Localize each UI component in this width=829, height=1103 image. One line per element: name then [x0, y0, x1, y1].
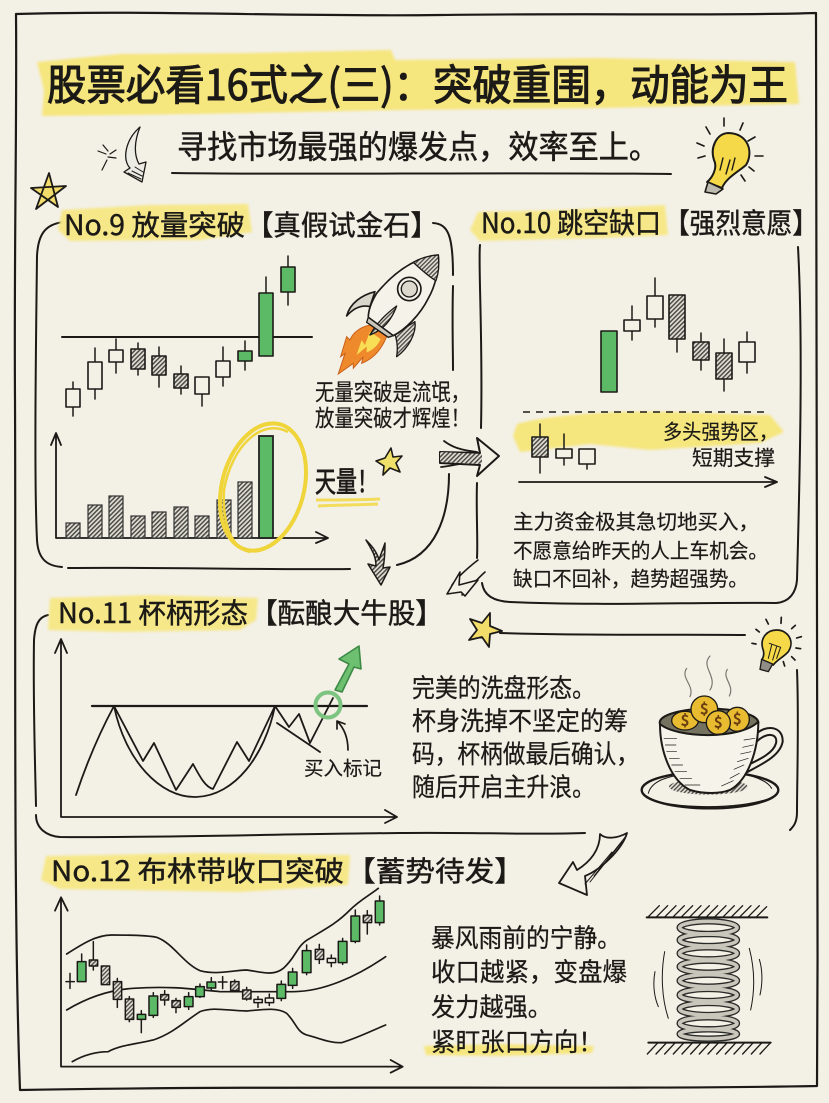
icon: star small — [376, 448, 402, 475]
heading: No.10 跳空缺口 — [481, 202, 661, 242]
explanation text: 主力资金极其急切地买入， — [513, 505, 759, 535]
cup rim — [660, 709, 758, 737]
yellow circle highlight — [207, 414, 319, 560]
heading: No.9 放量突破 — [64, 204, 245, 244]
explanation text: 缺口不回补，趋势超强势。 — [513, 562, 748, 592]
panel: No.10 gap — [470, 202, 818, 604]
rocket caption: 无量突破是流氓， — [315, 373, 470, 407]
icon: star top left — [31, 173, 66, 209]
rocket caption: 放量突破才辉煌！ — [315, 399, 470, 433]
icon: rocket — [338, 255, 439, 374]
subtitle: 寻找市场最强的爆发点，效率至上。 — [177, 122, 659, 168]
support zone label — [663, 415, 778, 471]
icon: light bulb — [697, 118, 763, 194]
Bollinger chart — [55, 888, 403, 1073]
explanation text: 完美的洗盘形态。 — [412, 668, 595, 705]
heading: 【蓄势待发】 — [346, 850, 524, 890]
heading — [51, 850, 524, 890]
cup bowl — [660, 722, 758, 793]
icon: coffee cup with coins: $ — [700, 698, 709, 720]
panel: No.12 Bollinger squeeze — [41, 850, 771, 1073]
explanation text — [424, 918, 627, 1059]
rocket caption — [315, 373, 470, 433]
heading: 【真假试金石】 — [246, 204, 438, 244]
explanation text: 杯身洗掉不坚定的筹 — [412, 701, 628, 738]
arrow: panel 11 to panel 12 — [559, 833, 627, 895]
buy label: 买入标记 — [304, 752, 382, 781]
panel: No.11 cup and handle — [34, 592, 801, 837]
buy label — [304, 721, 382, 781]
handle — [745, 728, 783, 773]
explanation text: 暴风雨前的宁静。 — [431, 918, 621, 955]
heading highlight — [58, 204, 252, 241]
heading: 【酝酿大牛股】 — [250, 592, 443, 632]
buy marker — [316, 692, 340, 718]
time axis — [519, 477, 777, 487]
heading highlight — [41, 853, 350, 892]
green arrow — [335, 646, 361, 692]
explanation text — [513, 505, 768, 592]
icon: coffee cup with coins: $ — [714, 711, 723, 733]
icon: small light bulb — [752, 617, 801, 672]
arrow: down from panel 9 — [366, 540, 390, 585]
arrow: panel 9 to panel 10 — [440, 438, 499, 476]
heading: No.12 布林带收口突破 — [51, 850, 344, 890]
candlestick chart — [601, 278, 755, 392]
steam — [685, 656, 731, 697]
support zone highlight — [513, 412, 784, 452]
candlestick chart — [62, 256, 312, 416]
panel frame — [477, 245, 801, 604]
explanation text: 发力越强。 — [431, 987, 552, 1024]
icon: curved arrow down — [98, 127, 146, 182]
explanation text: 不愿意给昨天的人上车机会。 — [513, 534, 768, 564]
lower candlesticks — [532, 424, 595, 473]
icon: coffee cup with coins — [642, 656, 783, 808]
icon: compressed spring — [647, 906, 771, 1054]
icon: star — [469, 613, 502, 647]
explanation text: 紧盯张口方向！ — [431, 1022, 603, 1059]
title block — [37, 50, 799, 116]
explanation text: 收口越紧，变盘爆 — [431, 952, 627, 989]
heading — [481, 202, 818, 242]
panel frame — [35, 222, 453, 569]
icon: coffee cup with coins: $ — [680, 709, 690, 731]
heading highlight — [48, 595, 258, 632]
support zone label: 短期支撑 — [692, 441, 775, 471]
support zone label: 多头强势区， — [663, 415, 778, 445]
heading — [58, 592, 443, 632]
title highlight — [37, 50, 799, 116]
cup and handle chart — [55, 639, 397, 823]
arrow: panel 10 to panel 11 — [447, 560, 485, 596]
volume chart — [51, 414, 328, 560]
panel frame — [34, 615, 798, 837]
heading highlight — [470, 205, 668, 241]
explanation text: 随后开启主升浪。 — [412, 767, 595, 804]
title: 股票必看16式之(三)：突破重围，动能为王 — [47, 52, 788, 113]
heading: 【强烈意愿】 — [664, 202, 818, 242]
heading — [64, 204, 438, 244]
panel: No.9 volume breakout — [35, 204, 470, 569]
explanation text: 码，杯柄做最后确认， — [412, 734, 639, 771]
gap dashed line — [523, 411, 770, 413]
icon: coffee cup with coins: $ — [733, 708, 742, 730]
explanation text — [412, 668, 639, 804]
saucer — [642, 772, 778, 808]
heading: No.11 杯柄形态 — [58, 592, 248, 632]
coins — [672, 696, 749, 735]
callout: huge volume: 天量！ — [315, 459, 378, 501]
